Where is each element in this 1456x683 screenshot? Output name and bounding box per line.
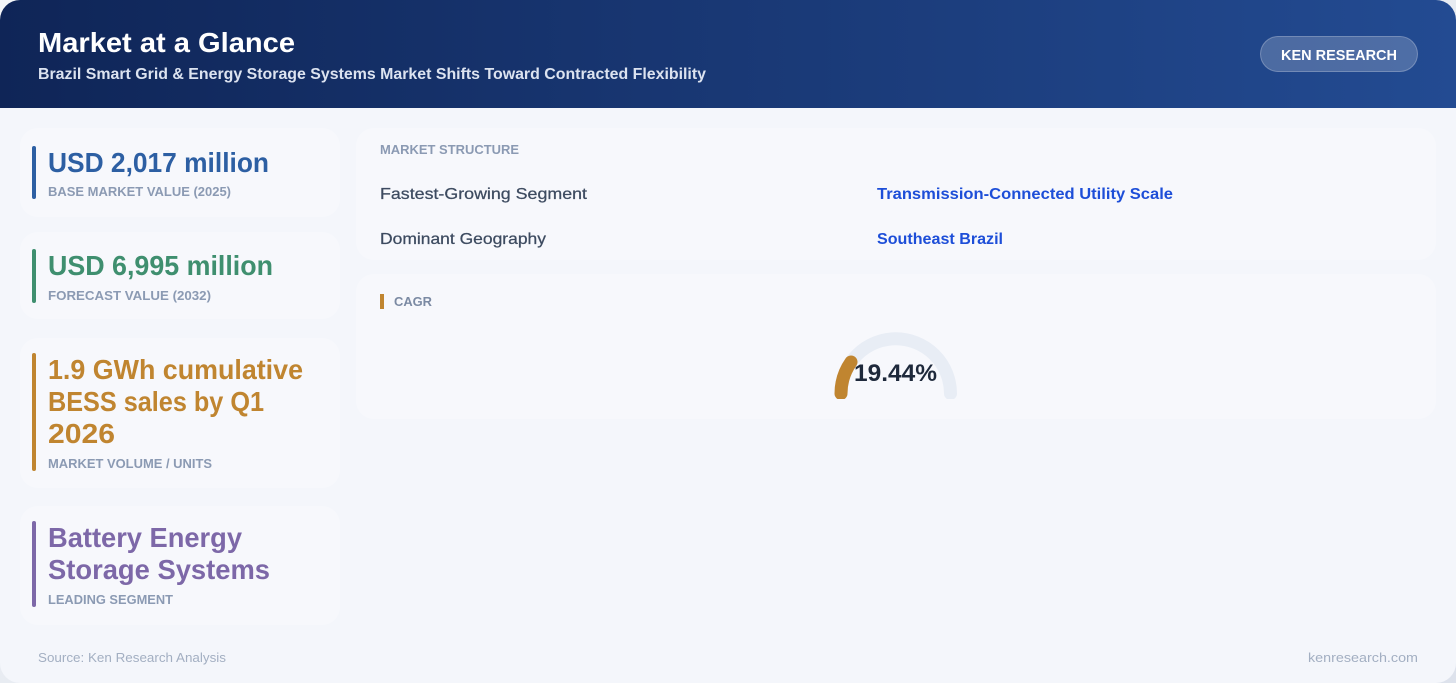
panel: CAGR (380, 294, 957, 399)
panel: forecast value: FORECAST VALUE (2032) (48, 288, 211, 303)
website: kenresearch.com (1308, 650, 1418, 665)
panel: market volume: 1.9 GWh cumulative (48, 354, 303, 385)
header banner (0, 0, 1456, 108)
panel: market volume (32, 353, 302, 471)
panel: market volume: MARKET VOLUME / UNITS (48, 456, 212, 471)
panel: market volume: BESS sales by Q1 (48, 386, 264, 417)
panel: forecast value: USD 6,995 million (48, 250, 273, 281)
panel: market structure: Fastest-Growing Segment (380, 186, 588, 203)
panel: market structure: Dominant Geography (380, 231, 546, 248)
panel: leading segment (32, 521, 269, 607)
panel: CAGR: CAGR (394, 294, 433, 309)
gauge chart (841, 339, 950, 394)
panel: market structure: MARKET STRUCTURE (380, 142, 519, 157)
panel: base market value: USD 2,017 million (48, 147, 269, 178)
gauge value: 19.44% (854, 360, 937, 387)
panel: market volume: 2026 (48, 418, 115, 449)
title: Market at a Glance (38, 27, 295, 58)
panel: forecast value (32, 249, 272, 303)
brand pill (1260, 36, 1418, 72)
panel: leading segment: Battery Energy (48, 522, 242, 553)
subtitle: Brazil Smart Grid & Energy Storage Systems Market Shifts Toward Contracted Flexibility (38, 66, 706, 83)
source note: Source: Ken Research Analysis (38, 650, 227, 665)
panel: leading segment: LEADING SEGMENT (48, 592, 173, 607)
panel: base market value (32, 146, 268, 199)
panel: market structure: Transmission-Connected Utility Scale (877, 186, 1173, 203)
panel: leading segment: Storage Systems (48, 554, 270, 585)
panel: base market value: BASE MARKET VALUE (2025) (48, 184, 231, 199)
panel: market structure: Southeast Brazil (877, 231, 1003, 248)
brand pill: KEN RESEARCH (1281, 47, 1397, 64)
panel: market structure (380, 145, 1172, 248)
